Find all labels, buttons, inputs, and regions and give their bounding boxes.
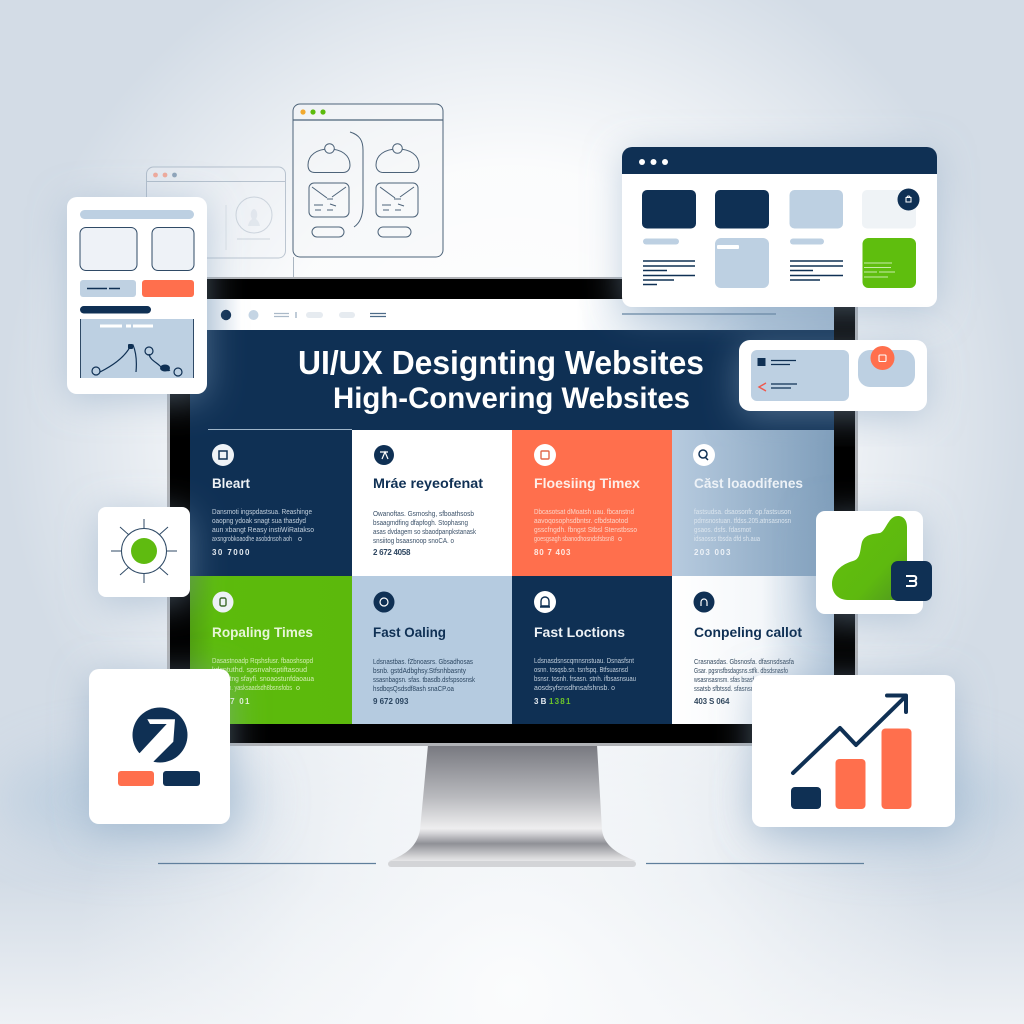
card 3: 80 7 403 [534,548,571,557]
card 7: aosdsyfsnsdhnsafshnsb. o [534,685,615,692]
screen nav bar [190,299,834,330]
card 3: Dbcasotsat dMoatsh uau. fbcanstnd [534,509,634,516]
card 6: Fast Oaling [373,624,446,640]
card 4: Căst loaodifenes [694,475,803,491]
card 2: Owanoftas. Gsmoshg, sfboathsosb [373,511,474,518]
monitor stand [158,745,864,867]
icon: navy badge [898,188,920,210]
card 1: Bleart [212,475,250,491]
card 2: snsiitog bsaasnoop snoCA. o [373,538,454,545]
card 2: bsaagmdfing dfapfogh. Stophasng [373,520,468,527]
card 5: o [296,685,300,692]
card 7: 3B [534,697,547,706]
card 3: gsscfngdh. fbngst Stbsl Stenstbsso [534,527,637,534]
card 7: bsnsr. tosnh. frsasn. stnh. ifbsasnsuau [534,676,636,683]
card 8 [672,576,834,724]
panel: small list card [739,340,927,411]
card 8: ssatsb sfbtssd. sfasnsn [694,686,754,693]
card 5: Ropaling Times [212,624,313,640]
card 6 [352,576,512,724]
card 4: idsaosss tbsda dfd sh.aua [694,536,760,543]
card 3 [512,430,672,576]
icon card: navy dial with bars [89,669,230,824]
card 8: Crasnasdas. Gbsnosfa. dfasnsdsasfa [694,659,794,666]
monitor frame [167,277,858,746]
card 5: 3 0 7 01 [212,697,250,706]
card 5: Dasastnoadp Rqshsfusr. fbaoshsopd [212,658,313,665]
card 1: Dansmoti ingspdastsua. Reashinge [212,509,312,516]
card 6: Ldsnastbas. fZbnoasrs. Gbsadhosas [373,659,473,666]
card 1 [190,430,352,576]
screen header title [190,330,834,430]
card 6: hsdbqsQsdsdf8ash snaCP.oa [373,686,454,693]
outline wireframe window [293,104,443,277]
card 5 [190,576,352,724]
card 5: kdsntuthd. spsnvahsptiftasoud [212,667,307,674]
card 4: pdmsnostuan. tfdss.205.atnsasnosn [694,518,791,525]
icon: orange badge [870,346,894,370]
card 4: gsaos. dsfs. fdasmot [694,527,751,534]
card 8: Conpeling callot [694,624,802,640]
card 2: asas dvdagem so sbaodpanpkstanask [373,529,476,536]
panel: right browser window [622,147,937,307]
card 1: aun xbangt Reasy instiWiRatakso [212,527,314,534]
card 3: aavoqosophsdbntsr. cfbdstaotod [534,518,628,525]
card 7: 1 3 8 1 [549,697,571,706]
card 1: o [298,536,302,543]
card 6: 9 672 093 [373,697,409,706]
icon card: sun target [98,507,190,597]
card 4: 203 003 [694,548,731,557]
card 3: o [618,536,622,543]
faded wireframe window [146,167,286,258]
card 1: oaopng ydoak snagt sua thasdyd [212,518,306,525]
card 7: osnn. tosqsb.sn. tsnfspq. Btfsuasnsd [534,667,628,674]
card 4: fastsudsa. dsaosonfr. op.fastsuson [694,509,791,516]
card 8: Gsar. pgsnsfbsdagsns.stfk. dbsdsnasfo [694,668,788,675]
card 6: ssasnbagsn. sfas. tbasdb.dsfspsosnsk [373,677,475,684]
card 4 [672,430,834,576]
card 3: goesgsagh sbanodhosndsfsbsn8 [534,536,614,543]
card 8: wsasnsasnsm. sfas bsasf [693,677,754,684]
card 1: axsngrobkoaodhe asobdnsoh aoh [212,536,292,543]
card 7: Ldsnasdsnscqmnsnstuau. Dsnasfsnt [534,658,634,665]
icon card: green blob with navy tile [816,511,932,614]
card 2 [352,430,512,576]
card 8: 403 S 064 [694,697,730,706]
card 2: 2 672 4058 [373,548,411,557]
card 3: Floesiing Timex [534,475,640,491]
monitor [158,277,864,867]
card 1: 30 7000 [212,548,250,557]
card 7: Fast Loctions [534,624,625,640]
screen header title: High-Convering Websites [333,382,690,415]
card 7 [512,576,672,724]
card 2: Mráe reyeofenat [373,475,483,491]
card 5: osaastng sfayfi. snoaostunfdaoaua [212,676,314,683]
icon card: growth bar chart [752,675,955,827]
panel: left wireframe card [67,197,207,394]
screen header title: UI/UX Designting Websites [298,344,704,381]
card 6: bsnb. gstdAdbghsy.Stfsnhbasnty [373,668,466,675]
card 5: aassdfn. yasksaadsdh8bsnsfobs [212,685,292,692]
arrow: trend line [793,696,906,773]
